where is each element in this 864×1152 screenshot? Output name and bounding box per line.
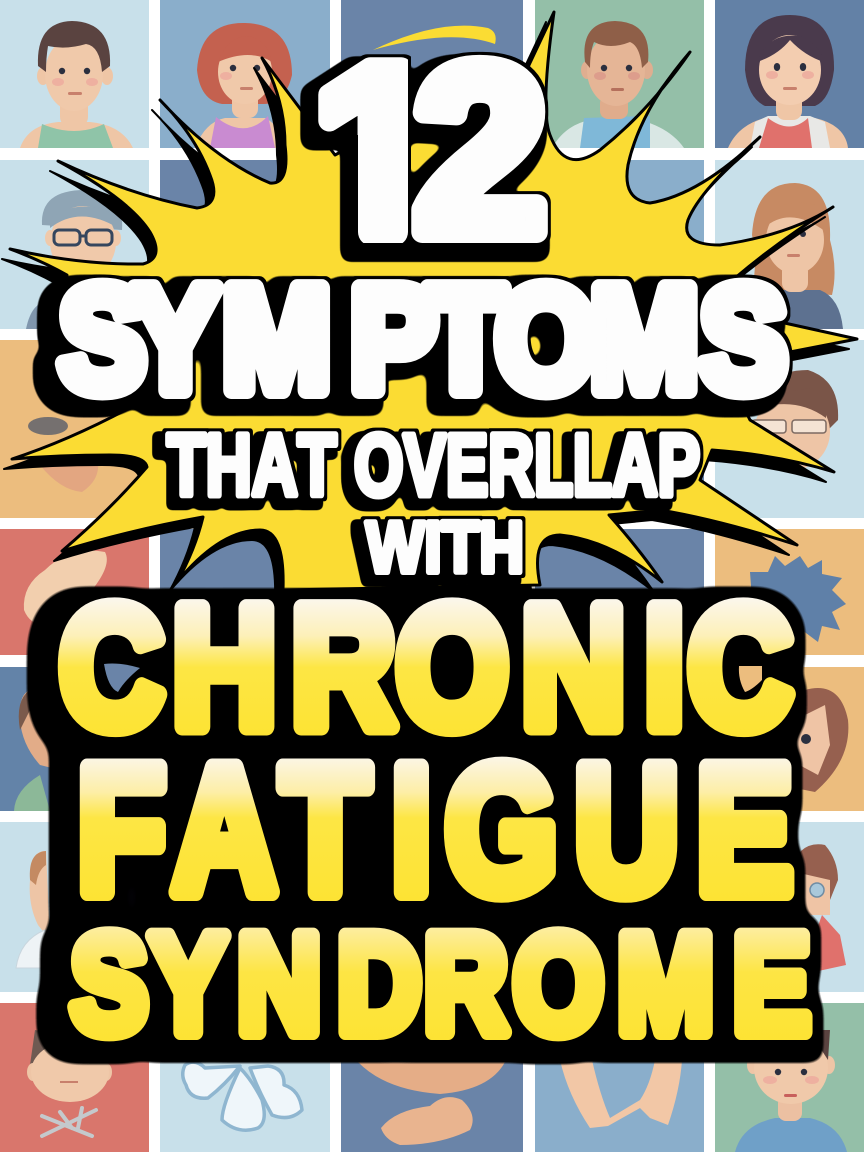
portrait: red-haired woman [195,23,292,148]
decoration: yellow swoosh above the 12 [373,26,496,50]
black backing block behind lower title [60,610,800,1040]
portrait: boy with green tank [20,21,133,148]
portrait: boy on red tile [27,1030,112,1102]
title: number 12 [300,52,551,262]
illustration: blue virus shape [750,556,846,642]
illustration: pale hand on red tile [24,550,107,625]
portrait: woman with brown curls [785,688,848,792]
illustration: body fragments in orange tile [28,417,98,492]
portrait: profile figure in blue tile [14,690,60,811]
portrait: boy on green tile [735,1030,847,1152]
portrait: man with glasses and messy hair [752,370,838,470]
title: SYNDROME: SYNDROME [70,907,810,1062]
illustration: clasped arms [560,1060,682,1128]
title: CHRONIC: CHRONIC [59,571,792,763]
background showing through right C counter [739,666,762,692]
portrait: figure with white coat [16,851,60,968]
title: WITH: WITH [366,508,524,588]
icon: white cloud cluster [183,1062,302,1130]
icon: crossed grey sticks [42,1108,96,1136]
title: number 12: 2 [414,18,546,283]
illustration: chin and resting hand [358,1062,505,1145]
portrait: woman with glasses and red top [790,844,846,975]
background showing through left C counter [104,664,140,692]
portrait: brown-haired boy [552,21,684,148]
portrait: dark-haired woman [728,15,848,148]
title: Chronic Fatigue Syndrome [59,571,810,1062]
title: FATIGUE: FATIGUE [77,729,793,931]
title: SYMPTOMS: SYMPTOMS [59,256,787,422]
portrait: grey-haired man with glasses [26,190,122,329]
title: number 12: 1 [313,18,445,283]
starburst [2,12,857,600]
portrait: auburn-haired woman [752,183,843,329]
